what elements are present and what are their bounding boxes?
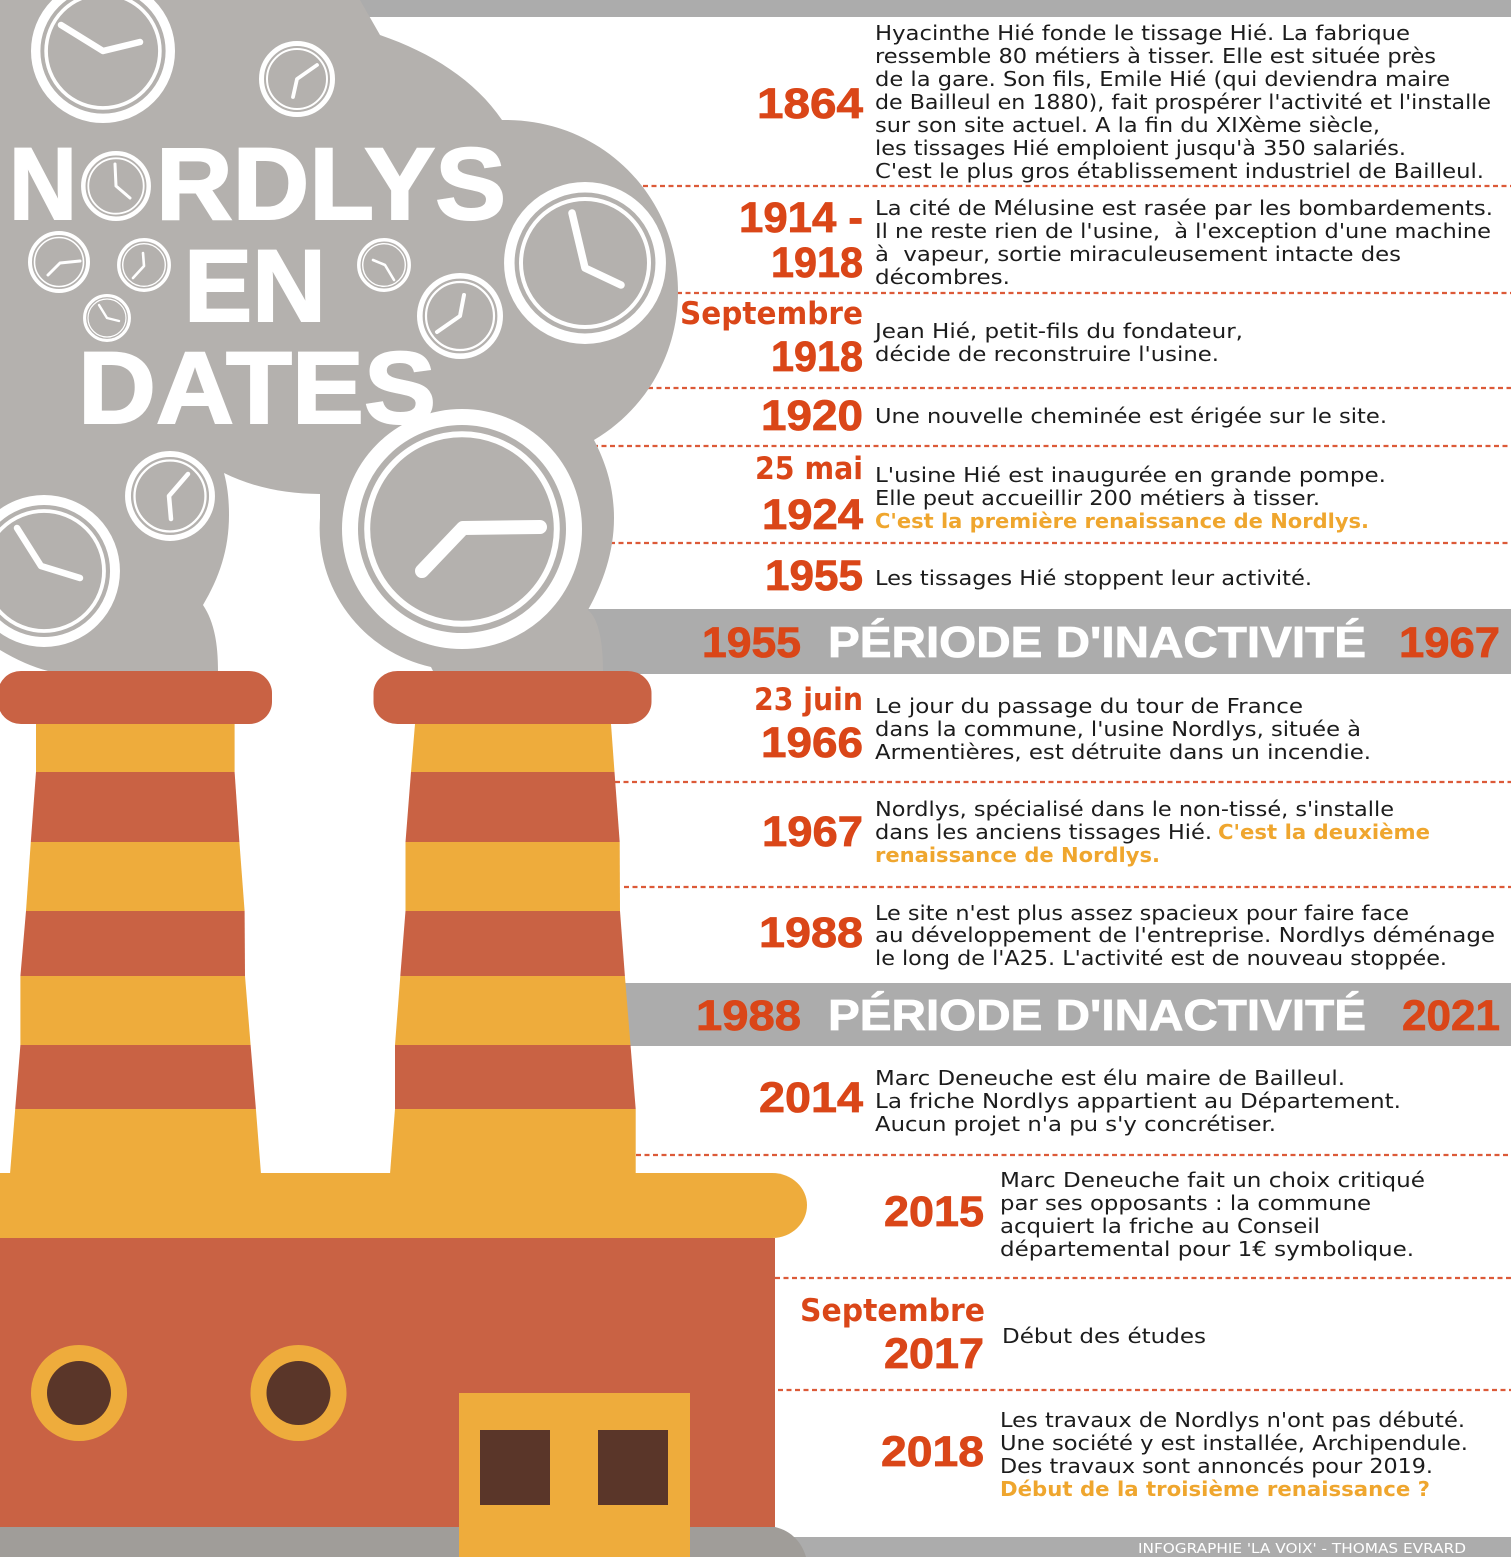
text 1966: Armentières, est détruite dans un incendie.: [875, 740, 1371, 764]
date 2015: 2015: [884, 1188, 984, 1236]
entry: 1988: [759, 901, 1495, 970]
band text: 1955 période d'inactivité 1967: 1967: [1399, 619, 1500, 667]
text 1967: Nordlys, spécialisé dans le non-tissé, s'installe: [875, 797, 1394, 821]
dashed timeline separators: [593, 186, 1511, 1390]
right chimney: [374, 671, 652, 1174]
band text: 1955 période d'inactivité 1967: [702, 617, 1500, 667]
date 25 mai 1924: [755, 451, 863, 539]
band text: 1955 période d'inactivité 1967: PÉRIODE D'INACTIVITÉ: [828, 617, 1366, 667]
text 1864: de Bailleul en 1880), fait prospérer l'activité et l'installe: [875, 90, 1491, 114]
date 1967: 1967: [762, 808, 863, 856]
date 1914-1918: [739, 194, 863, 287]
text 2015: par ses opposants : la commune: [1000, 1191, 1371, 1215]
round window right: [250, 1345, 346, 1441]
date 1920: 1920: [761, 392, 863, 440]
date 23 juin 1966: 1966: [761, 719, 863, 767]
top grey bar: [340, 0, 1511, 17]
door with two panes: [459, 1393, 690, 1557]
text 1967: renaissance de Nordlys.: [875, 843, 1160, 867]
entry: 1914-1918: [739, 194, 1493, 289]
date septembre 1918: [680, 296, 863, 381]
text 2014: La friche Nordlys appartient au Département.: [875, 1089, 1401, 1113]
text 1864: de la gare. Son fils, Emile Hié (qui deviendra maire: [875, 67, 1450, 91]
text 1914-1918: décombres.: [875, 265, 1010, 289]
title: N: [9, 127, 77, 241]
text 1966: [875, 694, 1371, 764]
factory ground base: [0, 1527, 806, 1557]
text 2018: Une société y est installée, Archipendule.: [1000, 1431, 1468, 1455]
band text: 1988 période d'inactivité 2021: [696, 990, 1500, 1040]
text 1920: Une nouvelle cheminée est érigée sur le site.: [875, 404, 1387, 428]
bottom grey bar: [780, 1537, 1511, 1557]
entry: 2018: [881, 1408, 1468, 1501]
text 1924: C'est la première renaissance de Nordlys.: [875, 509, 1369, 533]
text 2014: Marc Deneuche est élu maire de Bailleul.: [875, 1066, 1345, 1090]
text septembre 1918: [873, 319, 1243, 366]
date 1914-1918: 1914 -: [739, 194, 863, 242]
entry: septembre 1918: [680, 296, 1243, 381]
date septembre 2017: [800, 1293, 985, 1378]
text 1988: [875, 901, 1495, 970]
text septembre 1918: Jean Hié, petit-fils du fondateur,: [873, 319, 1243, 343]
entry: 1864: [757, 21, 1491, 183]
text 1966: dans la commune, l'usine Nordlys, située à: [875, 717, 1361, 741]
band text: 1988 période d'inactivité 2021: 1988: [696, 992, 801, 1040]
clock: smallest: [85, 296, 129, 340]
text 1864: sur son site actuel. A la fin du XIXème siècle,: [875, 113, 1380, 137]
text 1864: Hyacinthe Hié fonde le tissage Hié. La fabrique: [875, 21, 1410, 45]
text 1988: Le site n'est plus assez spacieux pour faire face: [875, 901, 1409, 925]
entry: 25 mai 1924: [755, 451, 1386, 539]
date septembre 2017: Septembre: [800, 1293, 985, 1329]
date 1864: 1864: [757, 80, 863, 128]
text 2014: Aucun projet n'a pu s'y concrétiser.: [875, 1112, 1276, 1136]
date 25 mai 1924: 1924: [762, 491, 863, 539]
text 1864: [875, 21, 1491, 183]
text 1988: au développement de l'entreprise. Nordlys déménage: [875, 923, 1495, 947]
text 1914-1918: [875, 196, 1493, 289]
band: période d'inactivité 1955-1967 background: [580, 609, 1511, 674]
clock: small left: [30, 233, 88, 291]
date 23 juin 1966: 23 juin: [754, 682, 863, 718]
date 2014: 2014: [759, 1074, 863, 1122]
clock: top centre: [262, 44, 332, 114]
text 1864: C'est le plus gros établissement industriel de Bailleul.: [875, 159, 1484, 183]
entry: 23 juin 1966: [754, 682, 1371, 767]
entry: 1920: [761, 392, 1387, 440]
clock: medium lower left: [128, 454, 212, 538]
text 1966: Le jour du passage du tour de France: [875, 694, 1303, 718]
title: RDLYS: [156, 127, 506, 241]
text 1914-1918: Il ne reste rien de l'usine, à l'exception d'une machine: [875, 219, 1491, 243]
text 1967: dans les anciens tissages Hié.: [875, 820, 1212, 844]
date 2018: 2018: [881, 1428, 984, 1476]
round window left: [31, 1345, 127, 1441]
date 1988: 1988: [759, 909, 863, 957]
title: EN: [184, 229, 326, 343]
text 2015: acquiert la friche au Conseil: [1000, 1214, 1320, 1238]
text 2018: [1000, 1408, 1468, 1501]
text 2014: [875, 1066, 1401, 1136]
date septembre 1918: 1918: [771, 333, 863, 381]
date 1914-1918: 1918: [771, 239, 863, 287]
entry: 2015: [884, 1168, 1425, 1261]
text 2015: départemental pour 1€ symbolique.: [1000, 1237, 1414, 1261]
entry: septembre 2017: [800, 1293, 1206, 1378]
text 2018: Des travaux sont annoncés pour 2019.: [1000, 1454, 1433, 1478]
factory building: [0, 1173, 807, 1557]
date 23 juin 1966: [754, 682, 863, 767]
text 1967: [875, 797, 1430, 867]
text 1967: C'est la deuxième: [1218, 820, 1430, 844]
band text: 1955 période d'inactivité 1967: 1955: [702, 619, 801, 667]
entry: 1955: [765, 552, 1312, 600]
entry: 2014: [759, 1066, 1401, 1136]
text 1924: [875, 463, 1386, 533]
text 1924: L'usine Hié est inaugurée en grande pompe.: [875, 463, 1386, 487]
date septembre 2017: 2017: [884, 1330, 984, 1378]
text 1914-1918: La cité de Mélusine est rasée par les bombardements.: [875, 196, 1493, 220]
footer credit: INFOGRAPHIE 'LA VOIX' - THOMAS EVRARD: [1138, 1541, 1466, 1557]
title: [9, 127, 506, 445]
band: période d'inactivité 1988-2021 background: [620, 983, 1511, 1046]
text 1924: Elle peut accueillir 200 métiers à tisser.: [875, 486, 1320, 510]
clock: large lower left: [0, 500, 115, 642]
text 1988: le long de l'A25. L'activité est de nouveau stoppée.: [875, 946, 1447, 970]
clock: top left: [36, 0, 170, 118]
text 1864: les tissages Hié emploient jusqu'à 350 salariés.: [875, 136, 1406, 160]
text 2018: Début de la troisième renaissance ?: [1000, 1477, 1430, 1501]
left chimney: [0, 671, 272, 1174]
date 25 mai 1924: 25 mai: [755, 451, 863, 487]
clock: small right of EN: [359, 240, 409, 290]
entry: 1967: [762, 797, 1430, 867]
text 2015: Marc Deneuche fait un choix critiqué: [1000, 1168, 1425, 1192]
text septembre 1918: décide de reconstruire l'usine.: [875, 342, 1219, 366]
text 2015: [1000, 1168, 1425, 1261]
clock: small centre left: [119, 240, 169, 290]
text septembre 2017: Début des études: [1002, 1324, 1206, 1348]
clock: medium right: [420, 276, 500, 356]
clock: letter O of Nordlys: [83, 153, 149, 219]
date 1955: 1955: [765, 552, 863, 600]
text 1914-1918: à vapeur, sortie miraculeusement intacte des: [875, 242, 1401, 266]
band text: 1988 période d'inactivité 2021: PÉRIODE D'INACTIVITÉ: [828, 990, 1366, 1040]
text 1864: ressemble 80 métiers à tisser. Elle est située près: [875, 44, 1436, 68]
clock: biggest centre: [350, 417, 574, 641]
smoke cloud: [0, 0, 678, 671]
date septembre 1918: Septembre: [680, 296, 863, 332]
clock: large right: [509, 187, 661, 339]
text 2018: Les travaux de Nordlys n'ont pas débuté.: [1000, 1408, 1465, 1432]
factory roof: [0, 1173, 807, 1238]
band text: 1988 période d'inactivité 2021: 2021: [1402, 992, 1500, 1040]
title: DATES: [78, 331, 436, 445]
factory wall: [0, 1238, 775, 1527]
text 1955: Les tissages Hié stoppent leur activité.: [875, 566, 1312, 590]
